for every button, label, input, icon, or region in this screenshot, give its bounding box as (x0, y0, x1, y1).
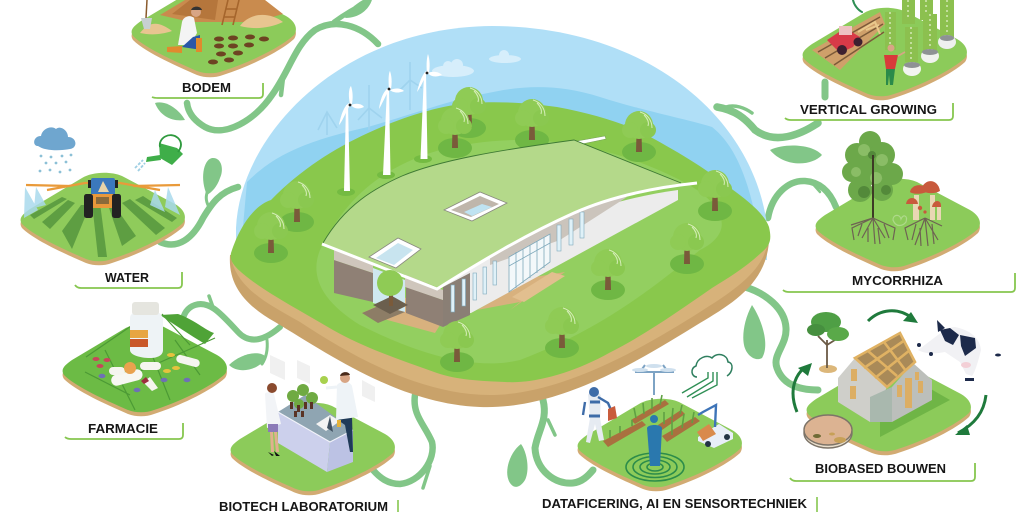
rear sliver (577, 136, 606, 144)
house shadow (880, 380, 950, 437)
petri dish (804, 415, 852, 448)
mushrooms (906, 181, 941, 220)
label: farmacie: FARMACIE (88, 422, 158, 436)
boom (26, 183, 180, 190)
island soil (230, 230, 769, 407)
label: farmacie (65, 422, 183, 439)
vine: vertical growing connector (717, 0, 862, 163)
vignette: vertical growing (803, 0, 967, 100)
courtyard tree (373, 270, 408, 314)
farmer (884, 44, 905, 85)
woman (265, 392, 281, 428)
plants (287, 384, 318, 417)
cloud (34, 127, 75, 150)
leaf veins (85, 313, 215, 410)
main island with dome (230, 26, 770, 407)
pills (92, 353, 201, 392)
vine: bodem connector (155, 0, 378, 130)
bottle (130, 312, 163, 358)
label: mycorrhiza (783, 273, 1015, 292)
white long wall (443, 190, 678, 313)
vignette: water (21, 127, 185, 265)
spray curtains (24, 187, 180, 218)
label: biobased bouwen: BIOBASED BOUWEN (815, 462, 946, 476)
vignette: biobased bouwen (793, 311, 1001, 455)
sky dome (236, 26, 767, 260)
label: dataficering: DATAFICERING, AI EN SENSORTECHNIEK (542, 497, 807, 511)
brown walls (334, 260, 373, 302)
label: bodem: BODEM (182, 81, 231, 95)
label: vertical growing: VERTICAL GROWING (800, 103, 937, 117)
vine: biotech connector (373, 395, 433, 488)
crop beds (603, 400, 700, 447)
cow (917, 320, 1001, 381)
tree crown (842, 131, 903, 220)
distant turbines (318, 62, 422, 135)
roof (323, 140, 681, 287)
red tractor (827, 28, 860, 53)
ladder (222, 0, 239, 25)
label: water (75, 271, 182, 288)
roof frame (855, 333, 915, 387)
towers (885, 0, 956, 76)
target rings (626, 453, 684, 481)
back trees (254, 87, 732, 274)
tree (807, 312, 849, 373)
plowed field (812, 12, 885, 70)
heart (893, 215, 906, 226)
label: mycorrhiza: MYCORRHIZA (852, 274, 943, 288)
rain (39, 154, 72, 173)
soil mounds (208, 34, 269, 64)
vignette: farmacie (63, 302, 227, 416)
crop rows (30, 196, 177, 257)
man (338, 416, 353, 452)
vine: data connector (507, 400, 593, 487)
pale wall panels (270, 355, 375, 402)
front trees (440, 249, 625, 372)
vignette: mycorrhiza (816, 131, 980, 271)
island grass (231, 102, 770, 382)
label: water: WATER (105, 271, 149, 285)
scientist (178, 16, 197, 45)
lab bench (278, 412, 330, 472)
roots (851, 218, 942, 246)
turbines (337, 54, 442, 196)
robot (586, 392, 604, 443)
vignette: biotech laboratorium (231, 355, 395, 495)
decks (362, 295, 440, 333)
tractor (91, 178, 115, 195)
glass (509, 234, 550, 292)
building (322, 136, 697, 333)
lighter lawn (316, 140, 722, 363)
drone (635, 365, 674, 395)
vine: farmacie connector (182, 296, 280, 370)
vignette: bodem (132, 0, 296, 77)
farmer (647, 425, 662, 466)
vine: mycorrhiza connector (768, 181, 836, 218)
label: biobased bouwen (790, 462, 975, 481)
vignette: dataficering (578, 355, 742, 491)
narrow windows (451, 212, 584, 312)
distant hills (240, 87, 760, 260)
microscope (327, 416, 333, 432)
label: vertical growing (785, 103, 953, 120)
clouds (432, 50, 521, 77)
shovel (146, 0, 147, 18)
cloud icon (692, 355, 732, 377)
vine: water connector (160, 158, 238, 245)
label: bodem (152, 81, 263, 98)
vine: biobased connector (743, 287, 818, 390)
label: biotech laboratorium: BIOTECH LABORATORIUM (219, 500, 388, 514)
skylights (444, 192, 507, 221)
excavation (160, 0, 283, 22)
house (838, 358, 887, 422)
cycle arrows (793, 311, 986, 433)
house openings (850, 369, 923, 408)
watering can (159, 143, 183, 165)
robot cart (698, 424, 733, 448)
